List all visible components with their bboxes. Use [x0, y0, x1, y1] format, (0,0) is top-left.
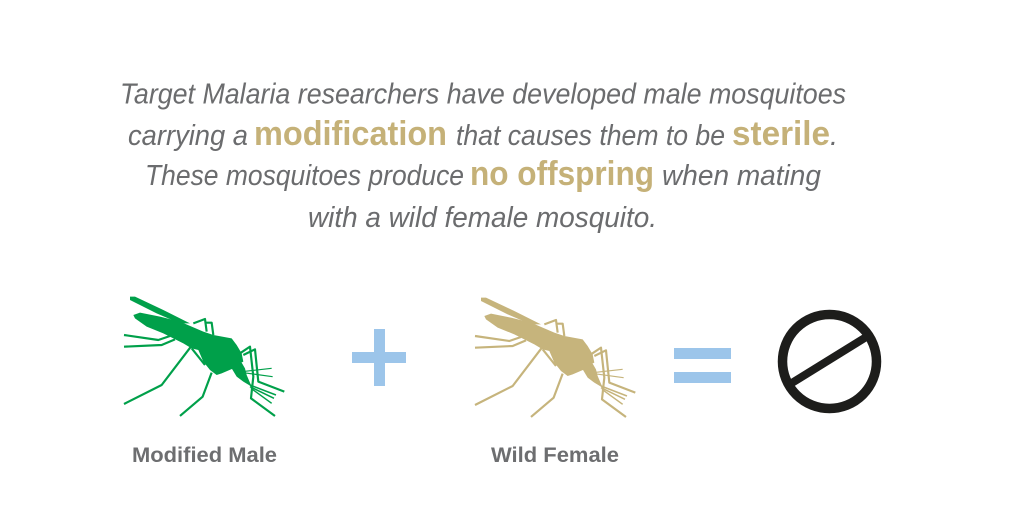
intro text block: Target Malaria researchers have developed male mosquitoes	[120, 78, 846, 110]
icon: plus sign	[352, 329, 406, 386]
intro text block: These mosquitoes produce	[145, 160, 464, 192]
intro text block	[120, 78, 846, 234]
label: wild female: Wild Female	[491, 444, 619, 467]
intro text block: carrying a	[128, 120, 248, 152]
intro text block: no offspring	[470, 155, 654, 193]
intro text block: sterile	[732, 115, 830, 153]
intro text block: that causes them to be	[456, 120, 725, 152]
icon: prohibited symbol	[782, 314, 876, 408]
label: modified male: Modified Male	[132, 444, 277, 467]
intro text block: when mating	[662, 160, 821, 192]
intro text block: .	[830, 120, 838, 152]
icon: equals sign	[674, 348, 731, 383]
icon: green modified male mosquito	[124, 297, 284, 416]
intro text block: with a wild female mosquito.	[308, 202, 657, 234]
icon: tan wild female mosquito	[475, 298, 635, 417]
intro text block: modification	[254, 115, 447, 153]
